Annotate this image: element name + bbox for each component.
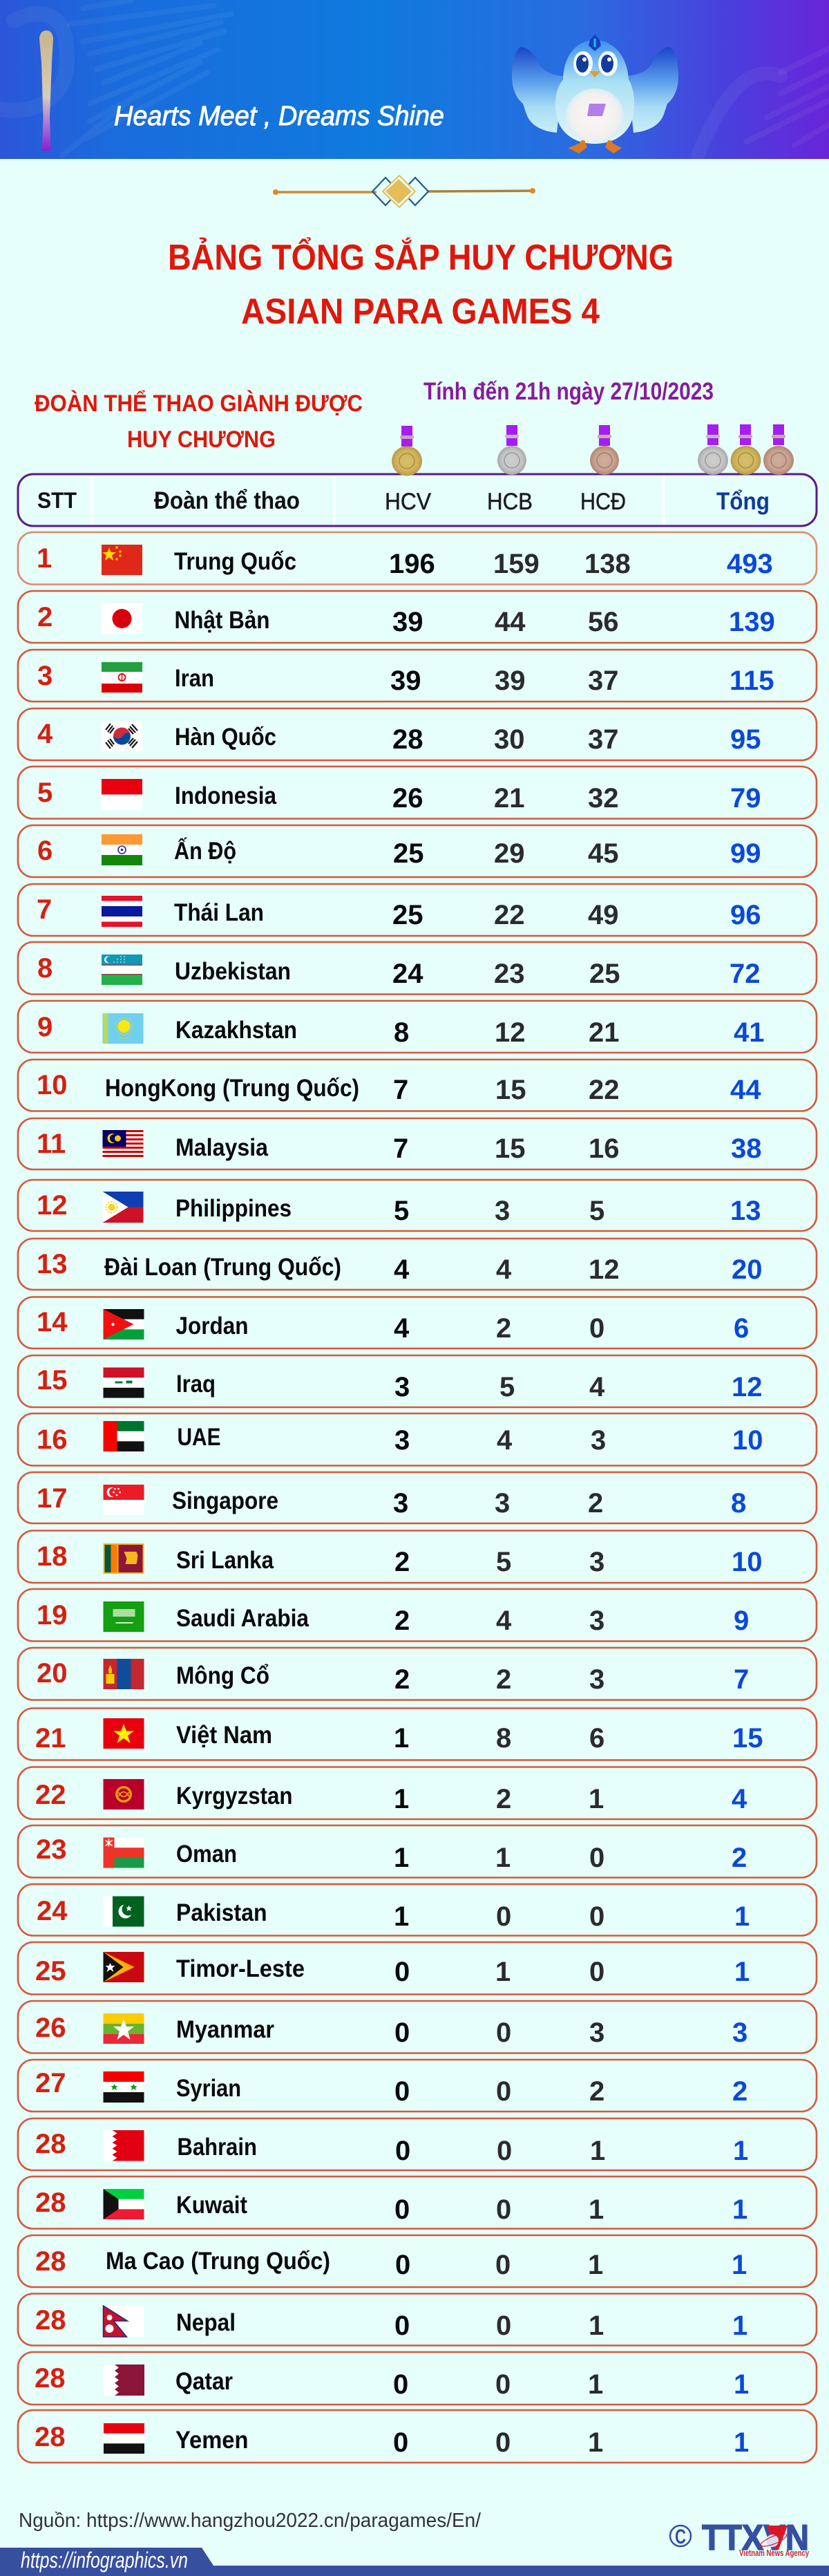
row 7: Thái Lan: 22 (494, 900, 525, 930)
row 14: Jordan: 2 (496, 1313, 511, 1344)
row 13: Đài Loan: 12 (589, 1254, 619, 1285)
flag: Iran (102, 662, 142, 693)
row 12: Philippines: 13 (730, 1196, 761, 1226)
flag: Uzbekistan (102, 955, 142, 985)
row 8: Uzbekistan: 72 (730, 959, 760, 989)
row 13: Đài Loan: Đài Loan (Trung Quốc) (104, 1254, 341, 1281)
subtitle: delegations (35, 391, 363, 453)
row 12: Philippines: Philippines (175, 1195, 292, 1222)
row 2: Nhật Bản: 44 (495, 607, 526, 637)
row 32: Qatar: 0 (495, 2369, 511, 2400)
icon: bronze medal (590, 425, 619, 475)
row 16: UAE: 10 (732, 1425, 763, 1456)
row 17: Singapore: Singapore (172, 1487, 278, 1514)
row 4: Hàn Quốc: 28 (392, 724, 423, 755)
row 22: Kyrgyzstan: 1 (394, 1784, 409, 1814)
row 22: Kyrgyzstan: 22 (35, 1780, 66, 1810)
row 19: Saudi Arabia: Saudi Arabia (176, 1605, 309, 1632)
flag: Oman (104, 1837, 144, 1868)
row 6: Ấn Độ: 99 (730, 838, 761, 869)
flag: Thailand (102, 896, 142, 927)
row 33: Yemen: Yemen (175, 2427, 249, 2454)
header labels: STT (37, 488, 77, 513)
flag: Malaysia (102, 1130, 144, 1158)
row 2: Nhật Bản: Nhật Bản (174, 607, 269, 634)
row 33: Yemen: 1 (734, 2427, 749, 2458)
flag: Vietnam (104, 1718, 144, 1749)
logo: TTXVN: C (675, 2526, 686, 2548)
row 8: Uzbekistan: Uzbekistan (175, 958, 291, 985)
flag: Saudi Arabia (104, 1601, 144, 1632)
row 18: Sri Lanka: 3 (589, 1547, 604, 1577)
row 30: Ma Cao: Ma Cao (Trung Quốc) (106, 2248, 330, 2275)
row 32: Qatar: 1 (734, 2369, 749, 2400)
row 26: Myanmar: 0 (496, 2018, 511, 2048)
row 25: Timor-Leste: 0 (589, 1957, 604, 1987)
flag: Kazakhstan (102, 1013, 144, 1044)
row 18: Sri Lanka: 2 (394, 1547, 410, 1577)
row 1: Trung Quốc: Trung Quốc (174, 548, 296, 575)
row 3: Iran: 39 (495, 666, 525, 696)
row 24: Pakistan: 1 (734, 1901, 750, 1932)
date note: Tính đến 21h ngày 27/10/2023 (423, 378, 714, 405)
row 21: Việt Nam: 6 (589, 1723, 604, 1754)
row 16: UAE: 3 (591, 1425, 606, 1456)
subtitle: delegations: ĐOÀN THỂ THAO GIÀNH ĐƯỢC (35, 391, 363, 417)
row 20: Mông Cổ: 3 (589, 1664, 604, 1695)
header labels: Đoàn thể thao (154, 487, 300, 514)
row 14: Jordan: Jordan (175, 1313, 249, 1339)
flag: Mongolia (104, 1659, 144, 1689)
row 33: Yemen (18, 2410, 817, 2463)
flag: South Korea (102, 721, 142, 751)
row 5: Indonesia: 21 (494, 783, 525, 814)
row 22: Kyrgyzstan: 2 (496, 1784, 511, 1814)
row 6: Ấn Độ: 29 (494, 838, 525, 869)
flag: Kuwait (104, 2189, 144, 2219)
row 23: Oman: 0 (589, 1843, 604, 1873)
row 25: Timor-Leste: 0 (394, 1957, 410, 1987)
flag: Kyrgyzstan (104, 1779, 144, 1809)
row 10: HongKong: 22 (589, 1075, 619, 1105)
row 6: Ấn Độ: 45 (588, 838, 619, 869)
header labels (37, 487, 770, 515)
flag: Iraq (104, 1367, 144, 1398)
row 31: Nepal: 0 (496, 2311, 511, 2341)
icon: silver medal (497, 425, 526, 475)
row 15: Iraq (18, 1355, 817, 1407)
row 28: Bahrain: 1 (733, 2136, 748, 2166)
row 9: Kazakhstan: Kazakhstan (175, 1017, 297, 1044)
icon: mascot (512, 35, 678, 153)
row 10: HongKong: HongKong (Trung Quốc) (105, 1075, 359, 1102)
row 21: Việt Nam: 1 (394, 1723, 409, 1754)
row 21: Việt Nam: 15 (732, 1723, 763, 1754)
row 31: Nepal: 0 (394, 2311, 410, 2341)
row 20: Mông Cổ: Mông Cổ (176, 1662, 269, 1689)
row 9: Kazakhstan: 41 (734, 1017, 764, 1048)
row 27: Syrian (18, 2060, 817, 2112)
row 14: Jordan: 14 (37, 1307, 68, 1337)
row 17: Singapore: 3 (495, 1488, 510, 1519)
icon: three medals (698, 424, 794, 475)
row 27: Syrian: 2 (589, 2076, 604, 2107)
row 15: Iraq: 12 (732, 1372, 763, 1402)
row 12: Philippines: 3 (495, 1196, 510, 1226)
row 11: Malaysia: Malaysia (175, 1134, 268, 1161)
flag: Pakistan (104, 1897, 144, 1927)
row 19: Saudi Arabia: 2 (394, 1606, 410, 1636)
row 3: Iran: 115 (730, 666, 774, 696)
row 12: Philippines: 5 (394, 1196, 409, 1226)
row 26: Myanmar: 3 (589, 2018, 604, 2048)
flag: Nepal (104, 2306, 144, 2337)
row 14: Jordan (18, 1297, 817, 1348)
flag: Myanmar (104, 2013, 144, 2044)
row 30: Ma Cao (18, 2235, 817, 2287)
row 1: Trung Quốc: 159 (493, 549, 540, 579)
row 17: Singapore (18, 1472, 817, 1523)
row 31: Nepal: 1 (732, 2311, 747, 2341)
row 8: Uzbekistan: 25 (589, 959, 620, 989)
row 2: Nhật Bản: 56 (588, 607, 619, 637)
title (168, 237, 674, 332)
flag: Qatar (104, 2365, 144, 2396)
row 11: Malaysia: 16 (589, 1134, 619, 1164)
row 32: Qatar (18, 2352, 817, 2405)
row 7: Thái Lan: Thái Lan (174, 899, 264, 926)
row 18: Sri Lanka: 18 (37, 1541, 68, 1572)
row 33: Yemen: 1 (588, 2427, 603, 2458)
row 26: Myanmar: 26 (35, 2013, 66, 2043)
row 9: Kazakhstan: 8 (394, 1017, 409, 1048)
row 6: Ấn Độ: 25 (393, 838, 424, 869)
row 27: Syrian: 27 (35, 2068, 66, 2098)
row 5: Indonesia: Indonesia (175, 782, 276, 809)
row 11: Malaysia: 7 (393, 1134, 408, 1164)
row 2: Nhật Bản (18, 591, 817, 643)
row 30: Ma Cao: 28 (35, 2246, 66, 2277)
row 19: Saudi Arabia: 3 (589, 1606, 604, 1636)
footer bar (0, 2548, 829, 2576)
row 1: Trung Quốc: 493 (727, 549, 773, 579)
row 20: Mông Cổ: 2 (394, 1664, 410, 1695)
flag: Jordan (104, 1309, 144, 1339)
row 21: Việt Nam (18, 1709, 817, 1760)
row 30: Ma Cao: 0 (395, 2250, 410, 2280)
row 32: Qatar: 0 (393, 2369, 408, 2400)
row 7: Thái Lan (18, 884, 817, 936)
flag: China (102, 545, 142, 575)
row 25: Timor-Leste: 1 (495, 1957, 511, 1987)
row 11: Malaysia: 38 (731, 1134, 761, 1164)
row 7: Thái Lan: 7 (37, 894, 52, 925)
row 20: Mông Cổ: 2 (496, 1664, 511, 1695)
row 19: Saudi Arabia: 19 (37, 1600, 68, 1630)
row 25: Timor-Leste: Timor-Leste (176, 1955, 305, 1982)
row 31: Nepal: 1 (589, 2311, 604, 2341)
row 13: Đài Loan: 20 (732, 1254, 763, 1285)
row 28: Bahrain: 1 (590, 2136, 605, 2166)
row 30: Ma Cao: 0 (495, 2250, 511, 2280)
row 25: Timor-Leste: 1 (734, 1957, 750, 1987)
row 5: Indonesia: 79 (730, 783, 761, 814)
title: BẢNG TỔNG SẮP HUY CHƯƠNG (168, 237, 674, 278)
row 6: Ấn Độ: 6 (37, 836, 53, 866)
row 9: Kazakhstan: 12 (495, 1017, 525, 1048)
row 17: Singapore: 2 (588, 1488, 603, 1519)
flag: India (102, 834, 142, 865)
row 31: Nepal: Nepal (176, 2309, 236, 2336)
row 30: Ma Cao: 1 (732, 2250, 747, 2280)
header labels: HCĐ (580, 489, 626, 515)
row 10: HongKong: 15 (495, 1075, 526, 1105)
row 9: Kazakhstan: 9 (37, 1012, 53, 1042)
row 16: UAE: UAE (177, 1424, 221, 1451)
row 20: Mông Cổ: 20 (37, 1658, 68, 1689)
row 11: Malaysia: 11 (37, 1129, 66, 1159)
row 3: Iran: Iran (175, 665, 214, 692)
row 15: Iraq: 15 (37, 1365, 68, 1395)
row 1: Trung Quốc: 196 (389, 549, 435, 579)
row 10: HongKong (18, 1060, 817, 1111)
row 24: Pakistan: 1 (394, 1901, 409, 1932)
row 2: Nhật Bản: 139 (729, 607, 775, 637)
row 29: Kuwait: 28 (35, 2188, 66, 2218)
row 5: Indonesia: 26 (392, 783, 423, 814)
row 3: Iran: 3 (37, 661, 53, 691)
row 30: Ma Cao: 1 (588, 2250, 603, 2280)
row 29: Kuwait: 0 (496, 2194, 511, 2225)
icon: torch (39, 30, 53, 151)
row 14: Jordan: 0 (589, 1313, 604, 1344)
row 19: Saudi Arabia (18, 1589, 817, 1641)
row 18: Sri Lanka: 5 (496, 1547, 511, 1577)
row 2: Nhật Bản: 39 (392, 607, 423, 637)
row 4: Hàn Quốc: 30 (494, 724, 525, 755)
row 31: Nepal: 28 (35, 2305, 66, 2335)
flag: Syria (104, 2071, 144, 2103)
row 24: Pakistan: 0 (496, 1901, 511, 1932)
flag: Timor-Leste (104, 1952, 144, 1982)
row 8: Uzbekistan: 8 (37, 953, 53, 984)
flag: Singapore (104, 1485, 144, 1515)
row 23: Oman: Oman (176, 1841, 237, 1868)
row 22: Kyrgyzstan: 1 (589, 1784, 604, 1814)
row 17: Singapore: 17 (37, 1483, 68, 1514)
row 10: HongKong: 44 (730, 1075, 761, 1105)
row 5: Indonesia (18, 767, 817, 818)
row 27: Syrian: 0 (496, 2076, 511, 2107)
row 15: Iraq: 5 (499, 1372, 515, 1402)
row 16: UAE: 3 (394, 1425, 410, 1456)
row 3: Iran (18, 650, 817, 702)
row 19: Saudi Arabia: 4 (496, 1606, 512, 1636)
footer bar: https://infographics.vn (21, 2548, 188, 2573)
row 24: Pakistan: Pakistan (176, 1899, 267, 1926)
row 21: Việt Nam: 8 (496, 1723, 511, 1754)
banner (0, 0, 829, 159)
row 32: Qatar: 28 (35, 2363, 65, 2394)
source note: Nguồn: https://www.hangzhou2022.cn/paragames/En/ (19, 2510, 482, 2532)
row 14: Jordan: 6 (734, 1313, 749, 1344)
row 9: Kazakhstan: 21 (589, 1017, 619, 1048)
flag: Japan (102, 603, 142, 634)
row 29: Kuwait: 1 (732, 2194, 747, 2225)
row 24: Pakistan: 0 (589, 1901, 604, 1932)
row 24: Pakistan: 24 (37, 1896, 68, 1926)
row 6: Ấn Độ (18, 825, 817, 877)
row 1: Trung Quốc: 1 (37, 543, 52, 574)
row 11: Malaysia (18, 1118, 817, 1169)
subtitle: delegations: HUY CHƯƠNG (127, 426, 276, 453)
row 28: Bahrain (18, 2118, 817, 2170)
row 33: Yemen: 0 (495, 2427, 511, 2458)
row 5: Indonesia: 32 (588, 783, 619, 814)
row 11: Malaysia: 15 (495, 1134, 525, 1164)
row 23: Oman: 1 (495, 1843, 511, 1873)
row 17: Singapore: 3 (393, 1488, 408, 1519)
row 18: Sri Lanka: Sri Lanka (176, 1547, 274, 1574)
row 25: Timor-Leste (18, 1942, 817, 1995)
row 5: Indonesia: 5 (37, 778, 53, 808)
row 29: Kuwait: Kuwait (176, 2192, 247, 2219)
row 10: HongKong: 7 (393, 1075, 408, 1105)
icon: gold medal (392, 426, 422, 476)
row 4: Hàn Quốc: 4 (37, 719, 53, 749)
row 26: Myanmar: 3 (732, 2018, 747, 2048)
row 4: Hàn Quốc: 37 (588, 724, 619, 755)
row 13: Đài Loan (18, 1239, 817, 1290)
row 28: Bahrain: 0 (395, 2136, 410, 2166)
row 23: Oman: 2 (732, 1843, 747, 1873)
row 1: Trung Quốc: 138 (584, 549, 631, 579)
row 7: Thái Lan: 96 (730, 900, 761, 930)
header labels: Tổng (716, 488, 770, 515)
row 21: Việt Nam: Việt Nam (176, 1722, 272, 1749)
row 12: Philippines: 5 (589, 1196, 604, 1226)
row 12: Philippines: 12 (37, 1190, 68, 1221)
header labels: HCB (487, 489, 533, 515)
row 18: Sri Lanka (18, 1530, 817, 1583)
flag: Sri Lanka (104, 1543, 144, 1574)
row 29: Kuwait: 0 (394, 2194, 410, 2225)
divider ornament (273, 176, 535, 207)
flag: Indonesia (102, 779, 142, 810)
row 3: Iran: 37 (588, 666, 619, 696)
row 16: UAE: 4 (497, 1425, 513, 1456)
row 16: UAE: 16 (37, 1425, 68, 1455)
row 26: Myanmar (18, 2001, 817, 2053)
row 17: Singapore: 8 (731, 1488, 746, 1519)
row 33: Yemen: 0 (393, 2427, 408, 2458)
flag: Philippines (102, 1192, 144, 1223)
table header (18, 474, 817, 526)
row 8: Uzbekistan: 23 (494, 959, 525, 989)
row 15: Iraq: 4 (589, 1372, 605, 1402)
row 4: Hàn Quốc: 95 (730, 724, 761, 755)
row 25: Timor-Leste: 25 (35, 1956, 66, 1986)
row 15: Iraq: 3 (394, 1372, 410, 1402)
row 33: Yemen: 28 (35, 2422, 65, 2452)
row 28: Bahrain: 28 (35, 2129, 66, 2159)
row 7: Thái Lan: 25 (392, 900, 423, 930)
row 27: Syrian: 0 (394, 2076, 410, 2107)
row 31: Nepal (18, 2293, 817, 2346)
logo: TTXVN: TTXVN (702, 2518, 809, 2558)
row 9: Kazakhstan (18, 1001, 817, 1053)
row 27: Syrian: Syrian (176, 2075, 241, 2102)
row 21: Việt Nam: 21 (35, 1723, 66, 1754)
row 16: UAE (18, 1413, 817, 1465)
row 28: Bahrain: Bahrain (177, 2134, 257, 2161)
row 7: Thái Lan: 49 (588, 900, 619, 930)
row 8: Uzbekistan (18, 942, 817, 994)
row 6: Ấn Độ: Ấn Độ (174, 837, 236, 865)
row 32: Qatar: Qatar (175, 2368, 233, 2395)
title: ASIAN PARA GAMES 4 (241, 292, 600, 332)
row 10: HongKong: 10 (37, 1070, 68, 1100)
row 24: Pakistan (18, 1884, 817, 1935)
row 26: Myanmar: Myanmar (176, 2016, 274, 2043)
row 23: Oman (18, 1825, 817, 1877)
row 20: Mông Cổ (18, 1648, 817, 1700)
row 29: Kuwait: 1 (589, 2194, 604, 2225)
row 12: Philippines (18, 1180, 817, 1231)
flag: Yemen (104, 2423, 144, 2454)
row 22: Kyrgyzstan: 4 (732, 1784, 747, 1814)
flag: UAE (104, 1421, 144, 1451)
row 8: Uzbekistan: 24 (392, 959, 423, 989)
flag: Bahrain (104, 2130, 144, 2161)
row 27: Syrian: 2 (732, 2076, 747, 2107)
row 23: Oman: 23 (36, 1834, 66, 1865)
logo: TTXVN: Vietnam News Agency (739, 2548, 809, 2558)
row 13: Đài Loan: 4 (496, 1254, 512, 1285)
row 4: Hàn Quốc (18, 708, 817, 760)
row 29: Kuwait (18, 2177, 817, 2228)
row 26: Myanmar: 0 (394, 2018, 410, 2048)
row 2: Nhật Bản: 2 (37, 602, 53, 632)
row 22: Kyrgyzstan: Kyrgyzstan (176, 1783, 293, 1809)
row 3: Iran: 39 (390, 666, 421, 696)
row 22: Kyrgyzstan (18, 1767, 817, 1819)
row 4: Hàn Quốc: Hàn Quốc (175, 724, 276, 751)
row 28: Bahrain: 0 (497, 2136, 512, 2166)
header labels: HCV (385, 489, 431, 515)
row 14: Jordan: 4 (394, 1313, 410, 1344)
row 18: Sri Lanka: 10 (732, 1547, 763, 1577)
row 23: Oman: 1 (394, 1843, 409, 1873)
row 1: Trung Quốc (18, 532, 817, 585)
row 19: Saudi Arabia: 9 (734, 1606, 749, 1636)
row 15: Iraq: Iraq (176, 1371, 216, 1398)
row 13: Đài Loan: 13 (37, 1249, 68, 1279)
row 13: Đài Loan: 4 (394, 1254, 410, 1285)
slogan: Hearts Meet , Dreams Shine (114, 101, 444, 131)
row 20: Mông Cổ: 7 (734, 1664, 749, 1695)
row 32: Qatar: 1 (588, 2369, 603, 2400)
